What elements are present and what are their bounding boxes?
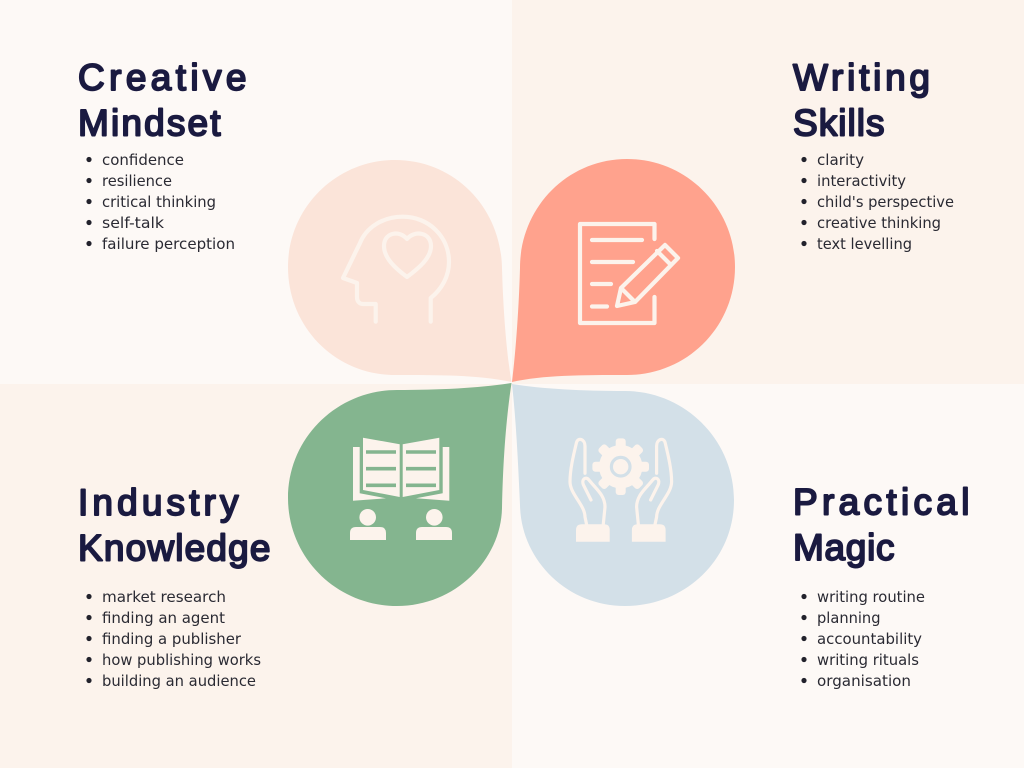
- list: creative mindset topics: critical thinking: [102, 193, 216, 211]
- list: writing skills topics: creative thinking: [817, 214, 941, 232]
- heading: industry knowledge: Knowledge: [78, 528, 270, 568]
- list: practical magic topics: accountability: [817, 630, 922, 648]
- list: creative mindset topics: confidence: [102, 151, 184, 169]
- background: bottom-left quadrant: [0, 384, 512, 768]
- list: industry knowledge topics: finding an agent: [102, 609, 225, 627]
- petal shape: blue: [512, 384, 734, 606]
- petal shape: pink: [288, 160, 512, 382]
- list: practical magic topics: writing rituals: [817, 651, 919, 669]
- list: industry knowledge topics: finding a publisher: [102, 630, 242, 648]
- panel: industry knowledge petal: [288, 383, 512, 606]
- text block: practical magic: [793, 482, 970, 690]
- panel: practical magic petal: [512, 384, 734, 606]
- list: writing skills topics: interactivity: [817, 172, 906, 190]
- panel: creative mindset petal: [288, 160, 512, 382]
- list: industry knowledge topics: how publishing works: [102, 651, 261, 669]
- heading: industry knowledge: [78, 482, 270, 568]
- panel: writing skills petal: [512, 159, 735, 382]
- text block: writing skills: [793, 57, 954, 253]
- list: practical magic topics: organisation: [817, 672, 911, 690]
- list: practical magic topics: writing routine: [817, 588, 925, 606]
- heading: industry knowledge: Industry: [78, 482, 239, 523]
- background: top-left quadrant: [0, 0, 512, 384]
- list: writing skills topics: text levelling: [817, 235, 912, 253]
- list: writing skills topics: child's perspective: [817, 193, 954, 211]
- list: creative mindset topics: failure perception: [102, 235, 235, 253]
- list: writing skills topics: clarity: [817, 151, 864, 169]
- heading: writing skills: Writing: [793, 57, 930, 98]
- text block: industry knowledge: [78, 482, 270, 690]
- petal shape: salmon: [512, 159, 735, 382]
- list: practical magic topics: planning: [817, 609, 880, 627]
- background: top-right quadrant: [512, 0, 1024, 384]
- icon: document and pencil: [580, 224, 678, 323]
- heading: writing skills: Skills: [793, 102, 884, 144]
- list: writing skills topics: [801, 151, 954, 253]
- heading: creative mindset: Mindset: [78, 102, 221, 144]
- heading: creative mindset: Creative: [78, 57, 246, 98]
- text block: creative mindset: [78, 57, 246, 253]
- list: industry knowledge topics: market research: [102, 588, 226, 606]
- list: creative mindset topics: [86, 151, 235, 253]
- icon: head with heart: [343, 217, 449, 322]
- list: creative mindset topics: resilience: [102, 172, 172, 190]
- list: industry knowledge topics: [86, 588, 261, 690]
- list: industry knowledge topics: building an audience: [102, 672, 256, 690]
- icon: hands holding a gear: [570, 438, 672, 542]
- heading: practical magic: Magic: [793, 527, 894, 568]
- heading: practical magic: Practical: [793, 482, 970, 522]
- list: practical magic topics: [801, 588, 925, 690]
- heading: writing skills: [793, 57, 930, 144]
- heading: creative mindset: [78, 57, 246, 144]
- list: creative mindset topics: self-talk: [102, 214, 164, 232]
- icon: open book with two readers: [350, 438, 452, 540]
- heading: practical magic: [793, 482, 970, 568]
- background: bottom-right quadrant: [512, 384, 1024, 768]
- petal shape: green: [288, 383, 512, 606]
